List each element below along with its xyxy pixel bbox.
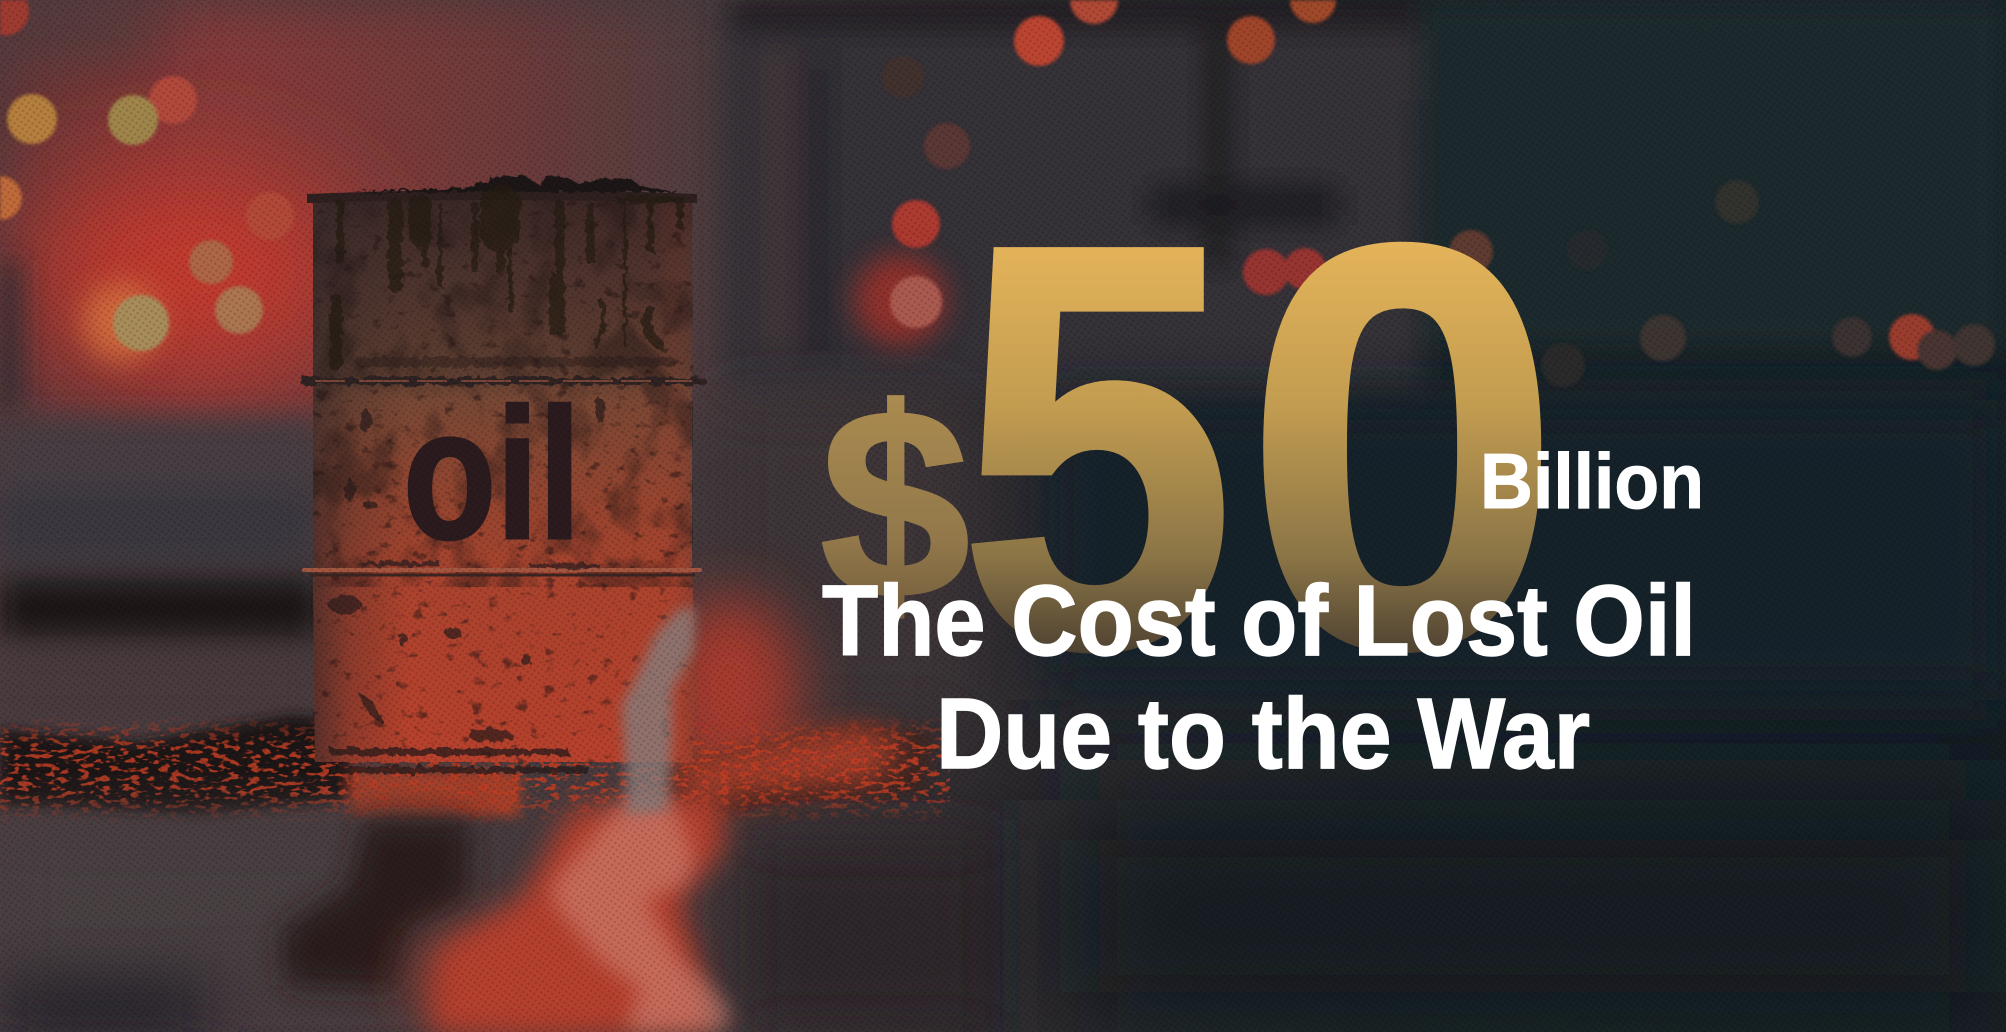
base rim [330, 752, 590, 770]
rust speckles [313, 197, 693, 767]
title [822, 565, 1696, 790]
lower ground [0, 825, 1000, 1032]
big number: $50 [820, 125, 1562, 767]
dollar sign: $ [820, 354, 970, 655]
barrel lettering: oil [403, 371, 581, 578]
rust mottling [313, 197, 693, 587]
title: The Cost of Lost Oil [822, 565, 1696, 677]
smoke plume over barrel [622, 607, 695, 815]
pink reflection zigzag [552, 800, 735, 1032]
red glow right of barrel [660, 595, 800, 785]
title: Due to the War [936, 678, 1590, 790]
dark object at left edge [0, 260, 20, 410]
barrel body [313, 197, 696, 762]
shadow below barrel [280, 820, 470, 990]
digit 5: 5 [959, 125, 1235, 767]
unit: Billion: Billion [1480, 437, 1704, 525]
top-left red sky [0, 0, 715, 420]
bokeh lights [0, 0, 1995, 387]
oil residue on top [350, 176, 680, 192]
oil barrel [304, 176, 702, 770]
ground strip [0, 715, 935, 816]
top rib [304, 377, 702, 385]
drips [336, 200, 680, 365]
digit 0: 0 [1243, 125, 1562, 767]
bottom rib [304, 568, 700, 572]
ground speckle [0, 715, 950, 825]
top rim [307, 190, 697, 203]
water reflection [410, 932, 670, 1032]
mid band [0, 420, 320, 718]
top centre structures [725, 0, 2006, 390]
rust spots [329, 398, 605, 742]
